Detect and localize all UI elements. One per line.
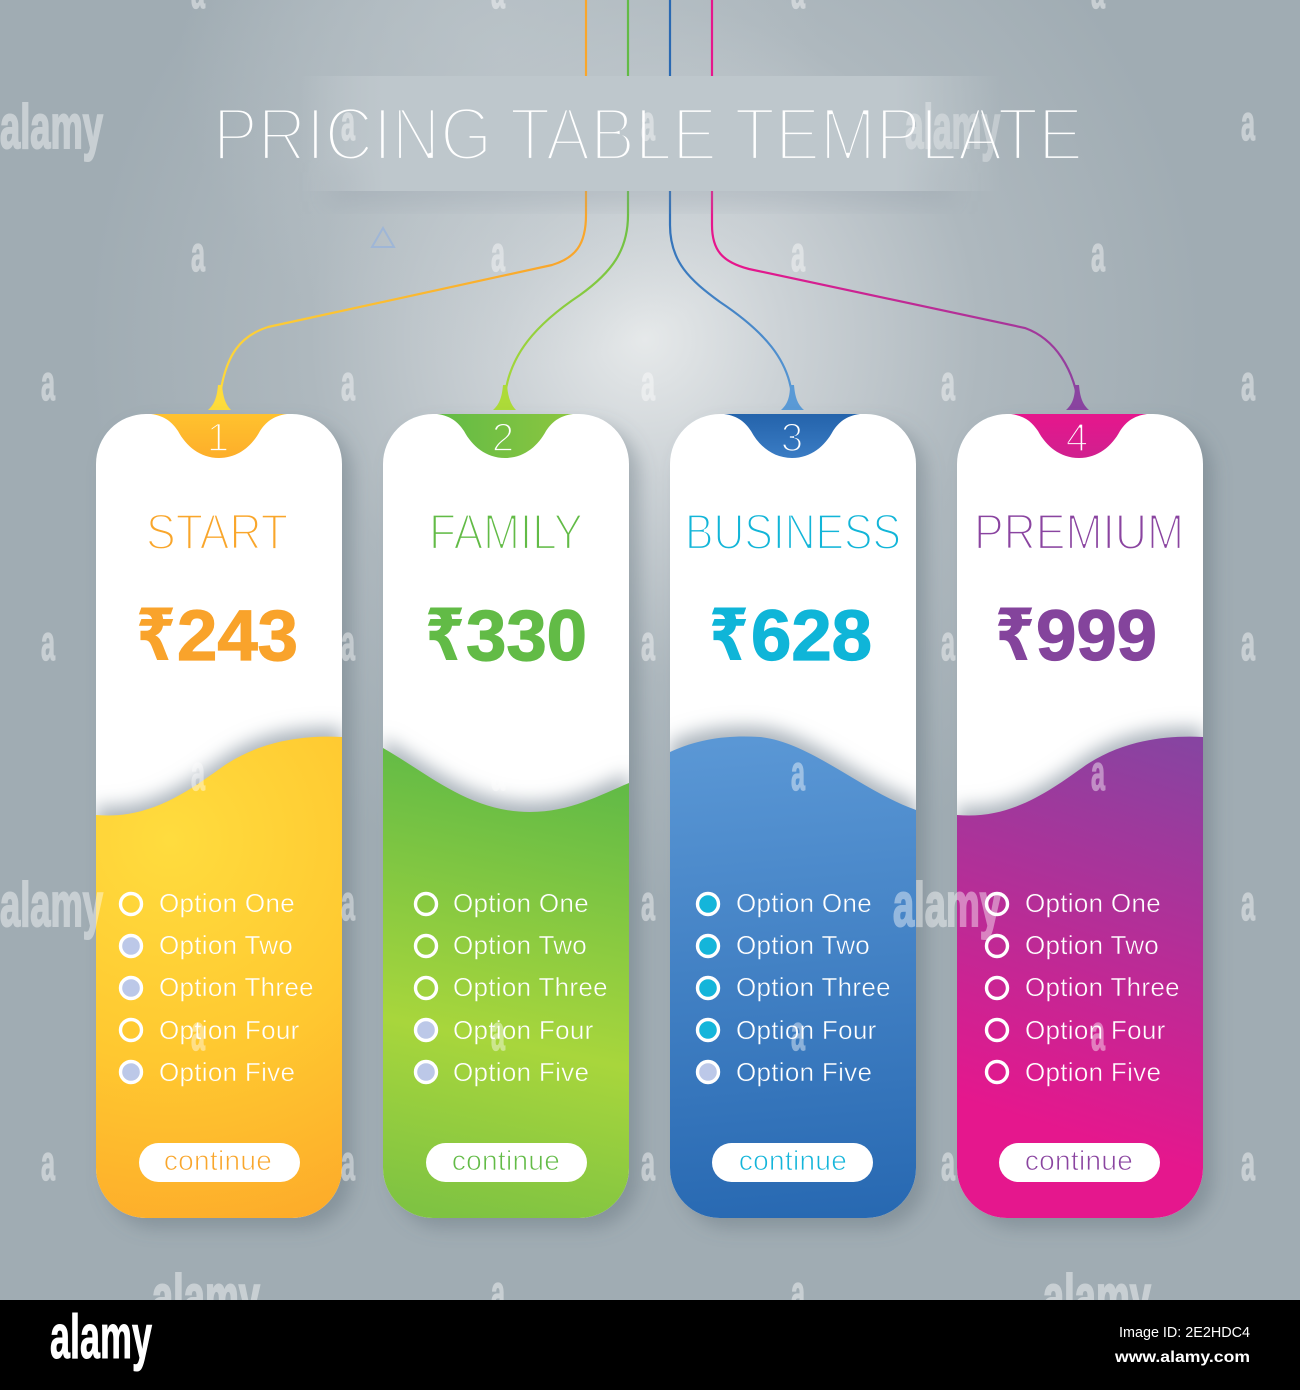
price: ₹ [709, 596, 749, 676]
options list: Option Five [736, 1057, 872, 1087]
watermarks: a [641, 875, 656, 931]
plan name: PREMIUM [974, 504, 1184, 560]
price: 330 [466, 597, 587, 676]
continue button [426, 1143, 587, 1182]
watermarks: a [791, 1005, 806, 1061]
options list: Option Three [1025, 972, 1180, 1002]
watermarks: alamy [152, 1263, 260, 1332]
continue button: continue [739, 1145, 847, 1176]
watermarks: a [491, 1005, 506, 1061]
watermarks: alamy [0, 93, 103, 162]
price: ₹ [995, 596, 1035, 676]
continue button [139, 1143, 300, 1182]
options list: Option Two [159, 930, 293, 960]
options list [416, 888, 608, 1087]
watermarks: alamy [905, 93, 1000, 162]
footer logo: alamy [50, 1303, 152, 1372]
watermarks: a [1091, 1005, 1106, 1061]
options list [986, 888, 1180, 1087]
options list: Option Two [453, 930, 587, 960]
watermarks: a [491, 1265, 506, 1321]
watermarks: a [191, 1005, 206, 1061]
number tab 4 [1011, 414, 1147, 460]
watermarks: a [791, 1265, 806, 1321]
options list: Option Three [159, 972, 314, 1002]
watermarks: a [191, 226, 206, 282]
options list: Option Four [1025, 1015, 1166, 1045]
options list: Option One [159, 888, 295, 918]
wave colour area [96, 728, 342, 1218]
watermarks: a [1091, 745, 1106, 801]
watermarks: a [941, 1135, 956, 1191]
watermarks: a [191, 745, 206, 801]
watermarks: a [941, 615, 956, 671]
price: 243 [177, 597, 298, 676]
number tab 2: 2 [492, 416, 514, 460]
options list: Option Four [159, 1015, 300, 1045]
options list [120, 888, 314, 1087]
price: 999 [1036, 597, 1157, 676]
watermarks: a [41, 1135, 56, 1191]
panel: premium plan [957, 414, 1213, 1228]
options list: Option Five [453, 1057, 589, 1087]
price: ₹ [136, 596, 176, 676]
continue button [999, 1143, 1160, 1182]
options list: Option Five [1025, 1057, 1161, 1087]
image id: Image ID: 2E2HDC4 [1119, 1324, 1250, 1341]
plan name: START [146, 504, 288, 560]
watermarks: a [341, 875, 356, 931]
wave colour area [383, 738, 629, 1218]
options list: Option Two [1025, 930, 1159, 960]
watermarks: a [341, 355, 356, 411]
continue button: continue [1025, 1145, 1133, 1176]
watermarks: a [941, 355, 956, 411]
title band [300, 76, 1000, 202]
number tab 1: 1 [207, 416, 229, 460]
continue button [712, 1143, 873, 1182]
price: 628 [751, 597, 872, 676]
plan name: BUSINESS [685, 504, 901, 560]
number tab 4: 4 [1066, 416, 1088, 460]
watermarks: a [341, 615, 356, 671]
watermarks: alamy [0, 871, 103, 940]
watermarks: a [1241, 875, 1256, 931]
watermarks: a [641, 615, 656, 671]
footer bar [0, 1300, 1300, 1390]
watermarks: a [341, 95, 356, 151]
watermarks: a [1241, 95, 1256, 151]
options list: Option Five [159, 1057, 295, 1087]
watermarks: a [1091, 226, 1106, 282]
plan name: FAMILY [429, 504, 583, 560]
watermarks: alamy [1043, 1263, 1151, 1332]
watermarks: a [791, 745, 806, 801]
watermarks: a [641, 95, 656, 151]
watermarks: a [641, 355, 656, 411]
website: www.alamy.com [1114, 1349, 1250, 1366]
options list: Option Two [736, 930, 870, 960]
connector lines [208, 0, 1089, 410]
watermarks: a [41, 355, 56, 411]
number tab 3 [724, 414, 860, 460]
continue button: continue [452, 1145, 560, 1176]
options list: Option One [736, 888, 872, 918]
title: PRICING TABLE TEMPLATE [213, 92, 1083, 176]
watermarks: a [341, 1135, 356, 1191]
watermarks: alamy [893, 871, 1001, 940]
watermarks: a [791, 226, 806, 282]
watermarks: a [1241, 615, 1256, 671]
watermarks: a [41, 615, 56, 671]
continue button: continue [164, 1145, 272, 1176]
options list: Option Three [453, 972, 608, 1002]
watermarks: a [641, 1135, 656, 1191]
number tab 3: 3 [781, 416, 803, 460]
watermarks: a [491, 745, 506, 801]
options list: Option Four [736, 1015, 877, 1045]
wave colour area [670, 726, 916, 1218]
options list: Option One [453, 888, 589, 918]
options list [698, 888, 891, 1087]
number tab 1 [151, 414, 287, 460]
watermarks: a [1241, 1135, 1256, 1191]
number tab 2 [437, 414, 573, 460]
watermarks: a [491, 226, 506, 282]
icon: small triangle outline [372, 228, 394, 247]
options list: Option Three [736, 972, 891, 1002]
panel: business plan [670, 414, 926, 1228]
watermarks: a [1241, 355, 1256, 411]
options list: Option One [1025, 888, 1161, 918]
panel: start plan [96, 414, 352, 1228]
options list: Option Four [453, 1015, 594, 1045]
panel: family plan [383, 414, 639, 1228]
wave colour area [957, 728, 1203, 1218]
price: ₹ [425, 596, 465, 676]
